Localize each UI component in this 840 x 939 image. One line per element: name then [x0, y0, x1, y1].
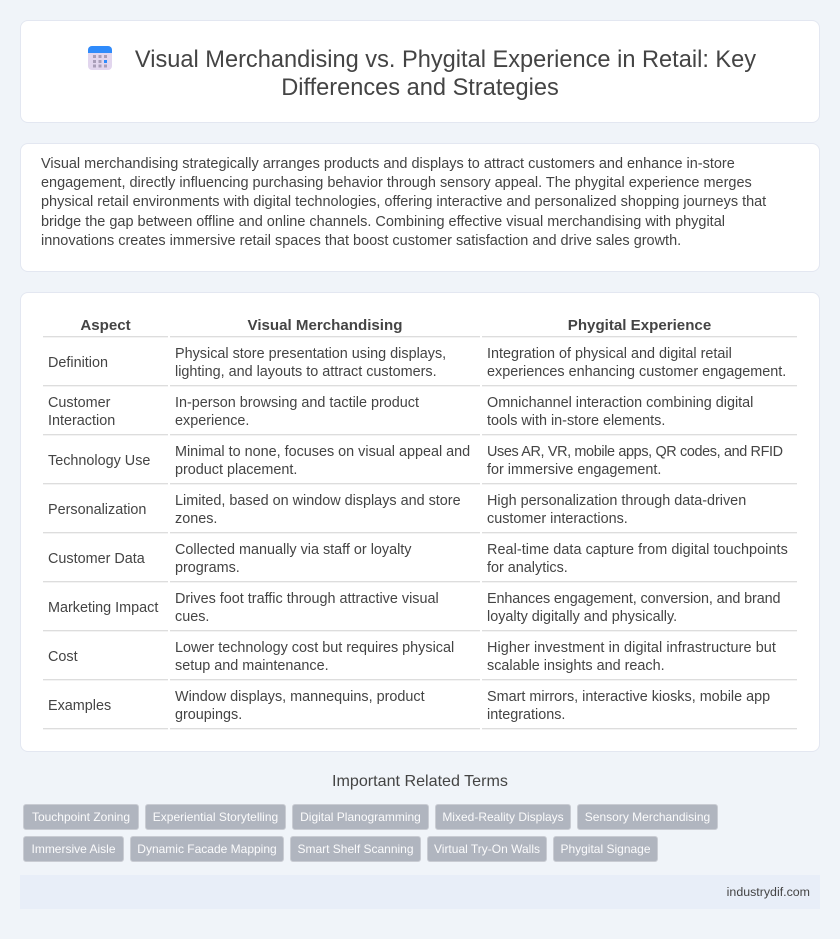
- row: personalization: zones.: [175, 511, 217, 527]
- row: cost: setup and maintenance.: [175, 658, 329, 674]
- text block: introduction: bridge the gap between offline and online channels. Combining effective visual merchandising with phygital: [41, 214, 725, 230]
- footer bar: [20, 875, 820, 909]
- text block: introduction: innovations creates immersive retail spaces that boost customer satisfaction and drive sales growth.: [41, 233, 681, 249]
- row: customer interaction: experience.: [175, 413, 249, 429]
- row: definition: [48, 346, 786, 380]
- row: examples: Examples: [48, 698, 111, 714]
- row: technology use: product placement.: [175, 462, 297, 478]
- row: customer interaction: In-person browsing and tactile product: [175, 395, 419, 411]
- row: customer data: Customer Data: [48, 551, 145, 567]
- row: marketing impact: cues.: [175, 609, 209, 625]
- row: examples: Smart mirrors, interactive kiosks, mobile app: [487, 689, 770, 705]
- tag list: Mixed-Reality Displays: [442, 810, 564, 824]
- tag list: Experiential Storytelling: [153, 810, 278, 824]
- panel: introduction: [20, 143, 820, 272]
- row: customer interaction: Interaction: [48, 413, 115, 429]
- row: technology use: Technology Use: [48, 453, 150, 469]
- table header: phygital experience: Phygital Experience: [568, 317, 711, 334]
- row: marketing impact: Marketing Impact: [48, 600, 158, 616]
- row: personalization: [48, 493, 746, 527]
- tag list: Touchpoint Zoning: [32, 810, 130, 824]
- table header: aspect: Aspect: [80, 317, 131, 334]
- tag list: Smart Shelf Scanning: [297, 842, 414, 856]
- text block: introduction: Visual merchandising strategically arranges products and displays to attract customers and enhance in-store: [41, 156, 735, 172]
- text block: introduction: engagement, directly influencing purchasing behavior through sensory appeal. The phygital experience merges: [41, 175, 752, 191]
- row: cost: Lower technology cost but requires physical: [175, 640, 454, 656]
- tag list: [23, 804, 718, 862]
- tag list: Digital Planogramming: [300, 810, 421, 824]
- row: examples: Window displays, mannequins, product: [175, 689, 425, 705]
- table header: visual merchandising: Visual Merchandising: [248, 317, 402, 334]
- row: definition: experiences enhancing customer engagement.: [487, 364, 786, 380]
- row: definition: Physical store presentation using displays,: [175, 346, 446, 362]
- row: examples: groupings.: [175, 707, 242, 723]
- tag list: Sensory Merchandising: [585, 810, 710, 824]
- icon: calendar: [88, 46, 112, 70]
- footer text: source: industrydif.com: [727, 885, 810, 899]
- row: customer interaction: tools with in-store elements.: [487, 413, 665, 429]
- panel: comparison table: [20, 292, 820, 752]
- row: customer interaction: [48, 395, 753, 429]
- row: customer data: [48, 542, 788, 576]
- row: definition: Definition: [48, 355, 108, 371]
- tag list: Phygital Signage: [560, 842, 651, 856]
- title: Visual Merchandising vs. Phygital Experience in Retail: Key: [135, 47, 756, 73]
- row: cost: Higher investment in digital infrastructure but: [487, 640, 776, 656]
- row: customer data: Real-time data capture from digital touchpoints: [487, 542, 788, 558]
- row: technology use: for immersive engagement.: [487, 462, 661, 478]
- tag list: Immersive Aisle: [31, 842, 116, 856]
- row: customer interaction: Customer: [48, 395, 110, 411]
- title: [135, 47, 756, 101]
- row: technology use: Uses AR, VR, mobile apps, QR codes, and RFID: [487, 444, 783, 460]
- row: definition: Integration of physical and digital retail: [487, 346, 732, 362]
- heading: important related terms: Important Related Terms: [332, 772, 508, 790]
- row: customer interaction: Omnichannel interaction combining digital: [487, 395, 753, 411]
- row: customer data: Collected manually via staff or loyalty: [175, 542, 412, 558]
- row: technology use: Minimal to none, focuses on visual appeal and: [175, 444, 470, 460]
- row: marketing impact: Drives foot traffic through attractive visual: [175, 591, 439, 607]
- row: definition: lighting, and layouts to attract customers.: [175, 364, 437, 380]
- title: Differences and Strategies: [281, 75, 559, 101]
- row: customer data: for analytics.: [487, 560, 568, 576]
- row: cost: Cost: [48, 649, 78, 665]
- text block: introduction: physical retail environments with digital technologies, offering interactive and personalized shopping journeys that: [41, 194, 766, 210]
- row: personalization: customer interactions.: [487, 511, 628, 527]
- text block: introduction: [41, 156, 766, 249]
- row: cost: [48, 640, 776, 674]
- row: technology use: [48, 444, 783, 478]
- tag list: Dynamic Facade Mapping: [137, 842, 277, 856]
- row: personalization: Personalization: [48, 502, 146, 518]
- row: marketing impact: loyalty digitally and physically.: [487, 609, 677, 625]
- panel: header: [20, 20, 820, 123]
- row: personalization: Limited, based on window displays and store: [175, 493, 461, 509]
- row: examples: integrations.: [487, 707, 565, 723]
- row: cost: scalable insights and reach.: [487, 658, 665, 674]
- row: marketing impact: Enhances engagement, conversion, and brand: [487, 591, 780, 607]
- tag list: Virtual Try-On Walls: [434, 842, 540, 856]
- row: marketing impact: [48, 591, 780, 625]
- row: personalization: High personalization through data-driven: [487, 493, 746, 509]
- row: customer data: programs.: [175, 560, 240, 576]
- row: examples: [48, 689, 770, 723]
